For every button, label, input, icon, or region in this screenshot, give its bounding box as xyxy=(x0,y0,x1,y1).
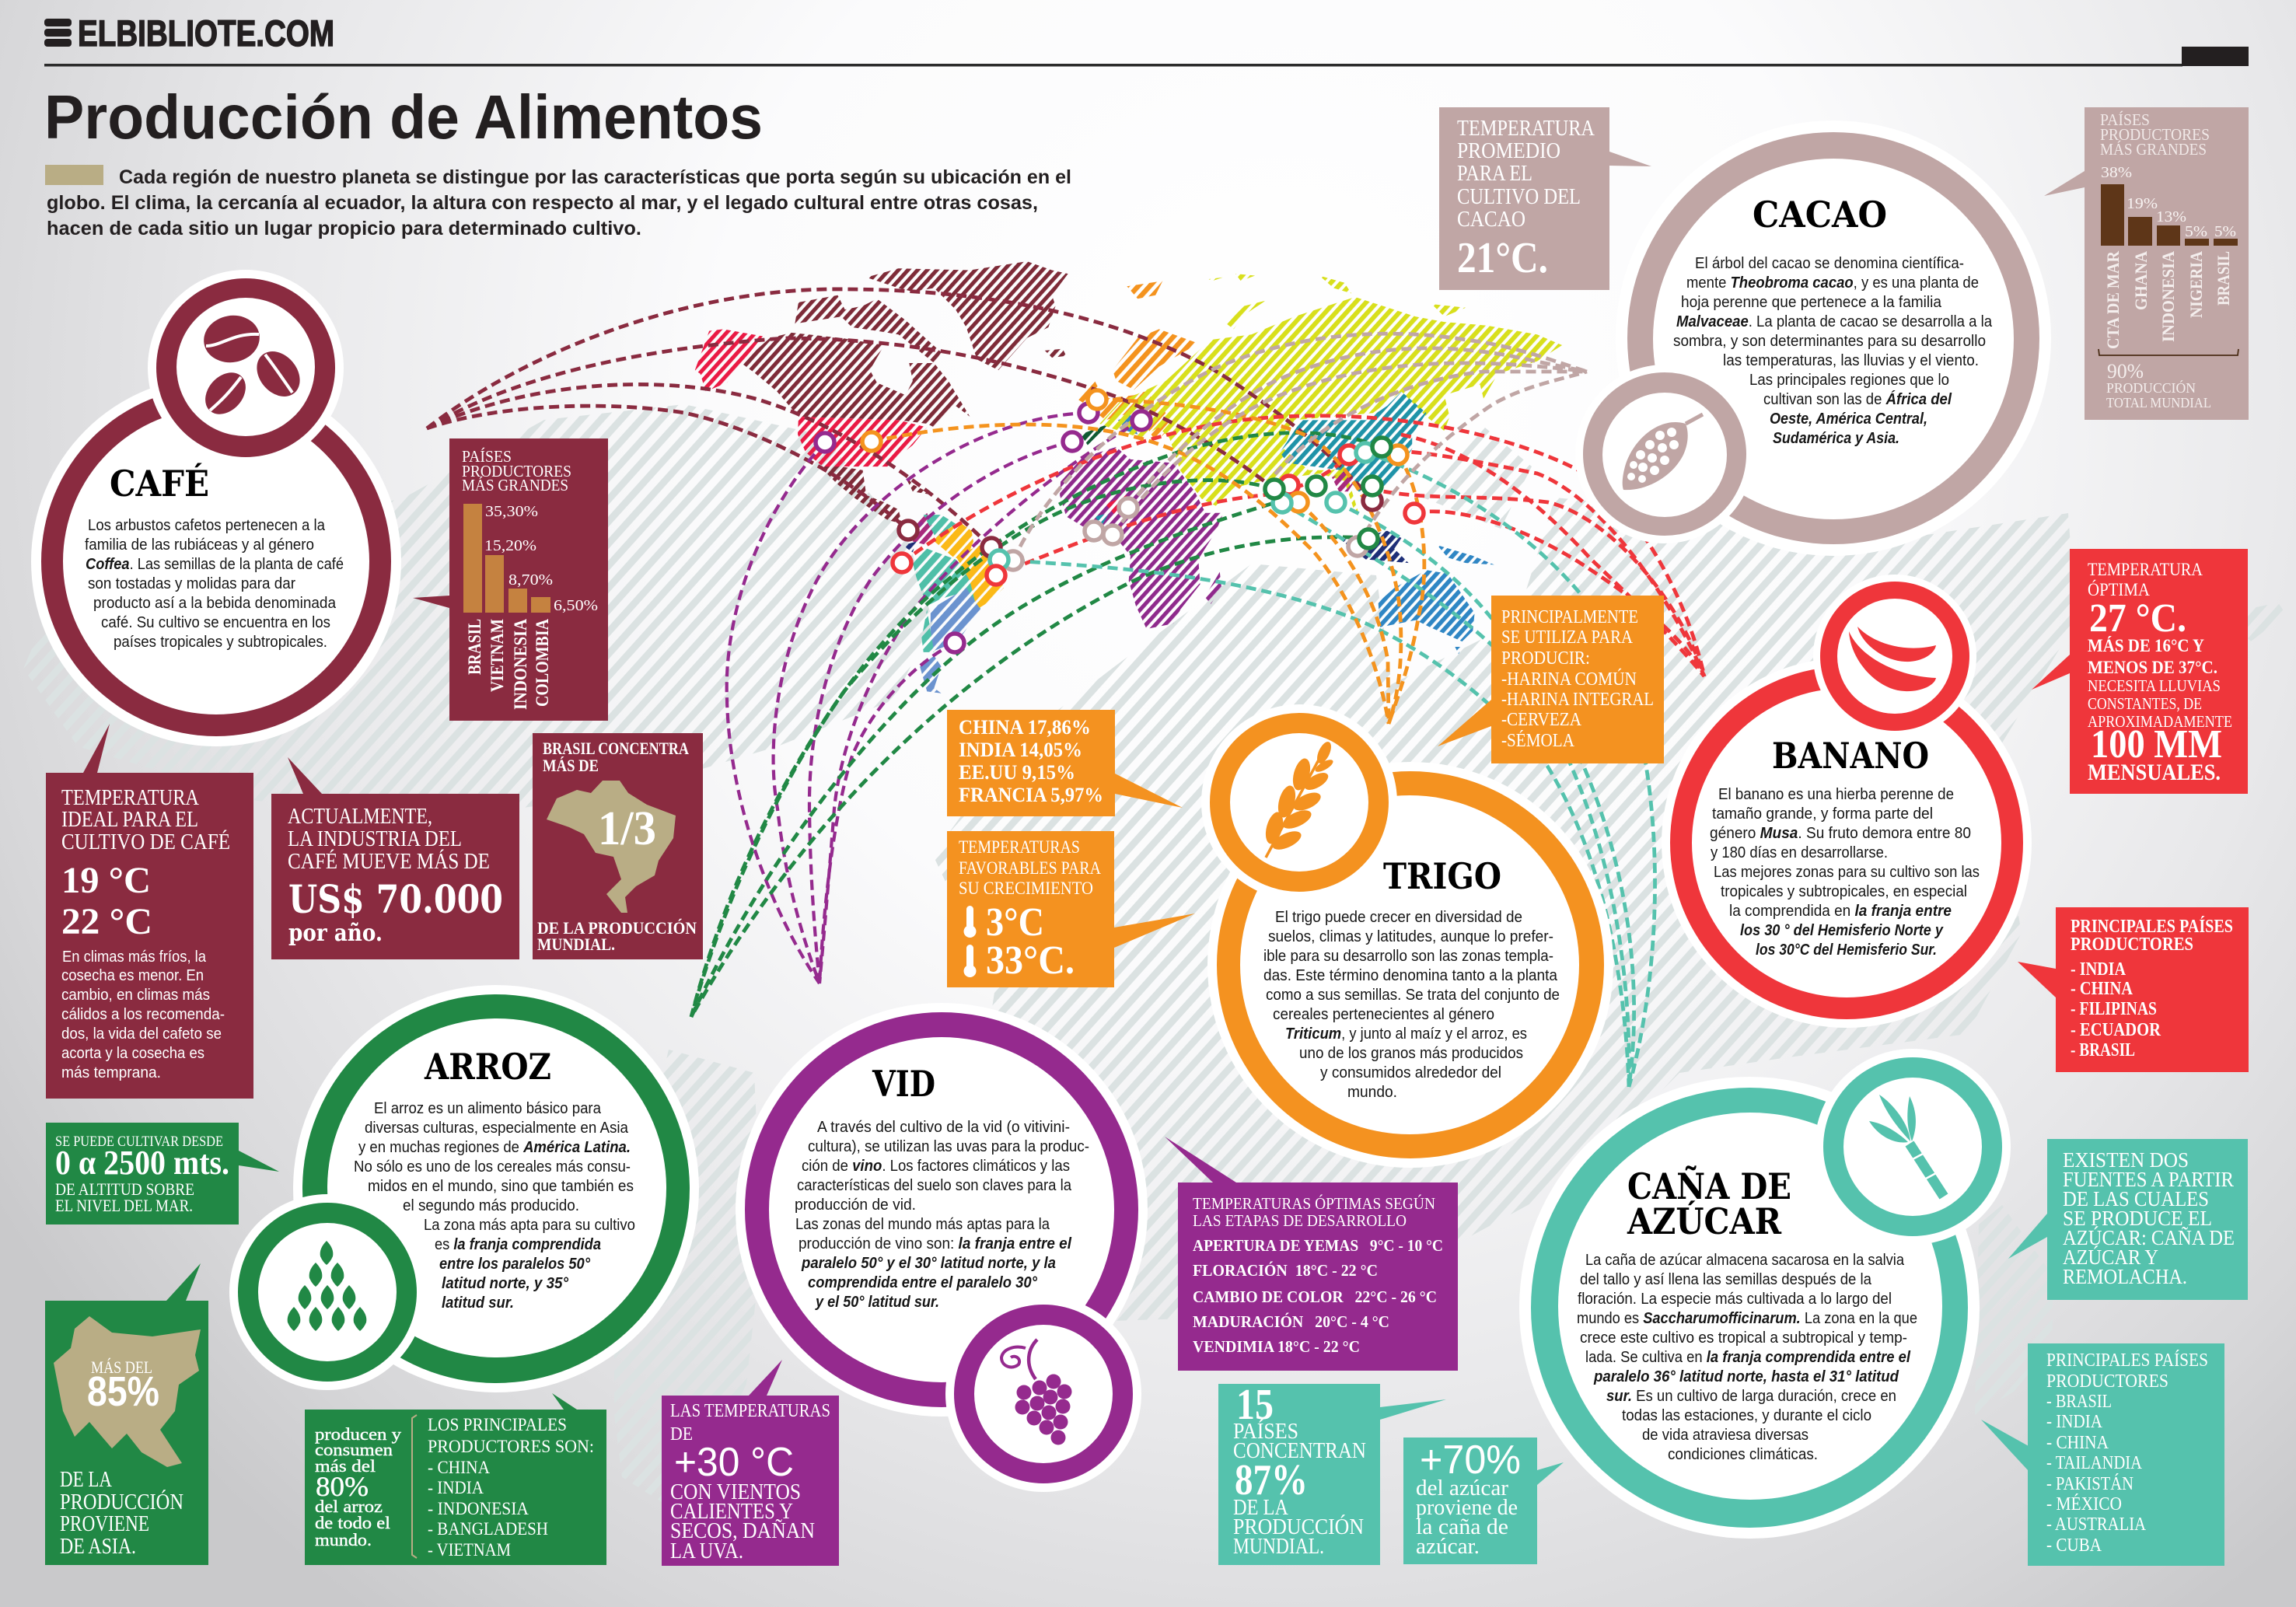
text: caña description: La caña de azúcar almacena sacarosa en la salvia xyxy=(1585,1252,1905,1269)
text: caña description: sur. Es un cultivo de larga duración, crece en xyxy=(1606,1388,1896,1405)
text: cacao description: Sudamérica y Asia. xyxy=(1773,430,1899,447)
callout: fuentes de azúcar: DE LAS CUALES xyxy=(2063,1187,2209,1210)
callout: productores de azúcar: - PAKISTÁN xyxy=(2046,1474,2133,1494)
chart: países productores de cacao: CTA DE MAR xyxy=(2103,250,2123,349)
background world map stripes xyxy=(23,404,2286,1516)
chart: países productores de cacao: GHANA xyxy=(2131,251,2151,310)
callout: temperatura café: más temprana. xyxy=(61,1064,161,1081)
text: vid description: producción de vid. xyxy=(795,1197,916,1214)
text: caña description: mundo es Saccharumofficinarum. La zona en la que xyxy=(1577,1310,1917,1327)
heading: café: CAFÉ xyxy=(110,462,209,505)
callout: temperaturas favorables trigo xyxy=(947,831,1195,987)
callout: temperaturas favorables trigo: FAVORABLES PARA xyxy=(959,858,1101,878)
callout: temperatura banano: TEMPERATURA xyxy=(2088,560,2203,579)
callout: temperatura banano: APROXIMADAMENTE xyxy=(2088,712,2232,731)
title: Producción de Alimentos xyxy=(44,82,763,152)
chart: países productores de cacao: PAÍSES xyxy=(2100,110,2150,129)
text: caña description: paralelo 36° latitud norte, hasta el 31° latitud xyxy=(1593,1368,1899,1385)
chart: países productores de cacao: 13% xyxy=(2156,208,2186,225)
callout: productores de arroz: 80% xyxy=(316,1471,369,1502)
icon: mapa de Asia xyxy=(54,1316,201,1467)
callout: productores de azúcar: - BRASIL xyxy=(2046,1392,2112,1412)
callout: temperatura banano: MÁS DE 16°C Y xyxy=(2088,636,2204,655)
callout: fuentes de azúcar: EXISTEN DOS xyxy=(2063,1148,2189,1172)
callout: productores de arroz xyxy=(305,1393,606,1565)
callout: temperaturas favorables trigo: SU CRECIMIENTO xyxy=(959,879,1093,898)
text: arroz description: latitud norte, y 35° xyxy=(442,1275,569,1292)
text: cacao description: mente Theobroma cacao, y es una planta de xyxy=(1686,274,1979,292)
chart: países productores de cacao: BRASIL xyxy=(2214,251,2233,306)
text: trigo description: y consumidos alrededor del xyxy=(1320,1064,1501,1081)
callout: productores de arroz: - CHINA xyxy=(428,1458,490,1477)
chart: países productores de cacao: PRODUCCIÓN xyxy=(2106,379,2196,396)
callout: productores de azúcar: PRODUCTORES xyxy=(2046,1371,2168,1392)
callout: fuentes de azúcar: AZÚCAR: CAÑA DE xyxy=(2063,1226,2235,1249)
callout: fuentes de azúcar: AZÚCAR Y xyxy=(2063,1245,2158,1269)
callout: temperaturas óptimas vid: VENDIMIA 18°C - 22 °C xyxy=(1193,1337,1360,1356)
text: trigo description: mundo. xyxy=(1347,1084,1397,1101)
text: cacao description: Las principales regiones que lo xyxy=(1749,372,1949,389)
chart: países productores de café: INDONESIA xyxy=(511,619,530,710)
callout: usos del trigo: -HARINA INTEGRAL xyxy=(1501,690,1654,710)
callout: temperatura banano xyxy=(2032,549,2248,794)
heading: arroz: ARROZ xyxy=(424,1046,551,1088)
world map: Asia and Oceania xyxy=(1099,274,1562,654)
callout: productores de arroz: mundo. xyxy=(315,1530,372,1549)
text: vid description: A través del cultivo de la vid (o vitivini- xyxy=(817,1119,1070,1136)
routes: banano xyxy=(902,416,1704,676)
callout: temperatura café: 19 °C xyxy=(61,860,151,901)
callout: 70% azúcar xyxy=(1403,1438,1564,1564)
routes: arroz xyxy=(691,433,1381,1017)
text: arroz description: No sólo es uno de los cereales más consu- xyxy=(354,1158,631,1176)
chart: países productores de café: 8,70% xyxy=(508,571,553,589)
callout: temperaturas favorables trigo: 3°C xyxy=(986,900,1044,945)
callout: productores de banano: - FILIPINAS xyxy=(2071,999,2157,1019)
callout: usos del trigo: SE UTILIZA PARA xyxy=(1501,627,1634,648)
callout: productores de arroz: - INDIA xyxy=(428,1478,484,1497)
callout: altitud arroz: 0 α 2500 mts. xyxy=(55,1144,229,1182)
text: vid description: características del suelo son claves para la xyxy=(797,1177,1072,1194)
callout: industria del café: CAFÉ MUEVE MÁS DE xyxy=(288,850,490,874)
callout: industria del café: ACTUALMENTE, xyxy=(288,805,432,829)
chart: países productores de café: 6,50% xyxy=(554,597,598,614)
callout: 85% Asia: PROVIENE xyxy=(60,1512,149,1536)
callout: productores de trigo xyxy=(947,710,1183,816)
callout: temperatura cacao: PARA EL xyxy=(1457,162,1532,186)
callout: productores de arroz: - INDONESIA xyxy=(428,1499,529,1518)
callout: temperaturas favorables trigo: TEMPERATURAS xyxy=(959,837,1080,857)
text: trigo description: ible para su desarrollo son las zonas templa- xyxy=(1263,948,1553,965)
heading: trigo: TRIGO xyxy=(1383,855,1501,897)
callout: brasil concentra: 1/3 xyxy=(598,802,656,855)
routes: trigo xyxy=(872,400,1424,724)
callout: temperaturas uva: +30 °C xyxy=(674,1440,794,1485)
text: trigo description: Triticum, y junto al maíz y el arroz, es xyxy=(1285,1025,1527,1043)
callout: 70% azúcar: la caña de xyxy=(1416,1515,1508,1539)
callout: usos del trigo: PRODUCIR: xyxy=(1501,648,1590,669)
text: trigo description: das. Este término denomina tanto a la planta xyxy=(1263,967,1558,984)
text: cacao description: El árbol del cacao se denomina científica- xyxy=(1695,255,1964,272)
text: vid description: Las zonas del mundo más aptas para la xyxy=(795,1216,1050,1233)
text: vid description: y el 50° latitud sur. xyxy=(815,1294,939,1311)
intro text xyxy=(45,165,1071,239)
callout: productores de arroz: - BANGLADESH xyxy=(428,1519,548,1539)
callout: productores de banano xyxy=(2018,907,2249,1072)
panel: trigo xyxy=(1201,704,1613,1168)
panel: cacao xyxy=(1575,121,2051,556)
callout: fuentes de azúcar: REMOLACHA. xyxy=(2063,1265,2187,1288)
text: café description: son tostadas y molidas para dar xyxy=(88,575,295,592)
callout: productores de arroz: - VIETNAM xyxy=(428,1540,511,1560)
routes: caña xyxy=(999,452,1655,1087)
chart: países productores de café: 35,30% xyxy=(485,503,538,520)
callout: temperatura banano: CONSTANTES, DE xyxy=(2088,694,2202,713)
text: cacao description: Malvaceae. La planta de cacao se desarrolla a la xyxy=(1676,313,1993,330)
text: vid description: cultura), se utilizan las uvas para la produc- xyxy=(808,1138,1089,1155)
callout: brasil concentra: DE LA PRODUCCIÓN xyxy=(537,918,697,938)
panel: arroz xyxy=(229,985,699,1392)
chart: países productores de cacao: NIGERIA xyxy=(2186,251,2206,318)
text: caña description: lada. Se cultiva en la franja comprendida entre el xyxy=(1585,1349,1910,1366)
callout: altitud arroz: EL NIVEL DEL MAR. xyxy=(55,1196,193,1215)
text: banano description: los 30°C del Hemisferio Sur. xyxy=(1756,941,1937,959)
chart: países productores de cacao: 5% xyxy=(2214,223,2236,240)
callout: brasil concentra: BRASIL CONCENTRA xyxy=(543,739,689,758)
callout: temperaturas óptimas vid: APERTURA DE YEMAS 9°C - 10 °C xyxy=(1193,1236,1443,1255)
callout: fuentes de azúcar: FUENTES A PARTIR xyxy=(2063,1168,2234,1191)
text: banano description: El banano es una hierba perenne de xyxy=(1718,786,1954,803)
callout: temperatura cacao xyxy=(1439,107,1651,290)
intro text: globo. El clima, la cercanía al ecuador, la altura con respecto al mar, y el legado cultural entre otras cosas, xyxy=(47,192,1038,214)
heading: caña de azúcar: AZÚCAR xyxy=(1627,1200,1782,1242)
callout: productores de banano: - ECUADOR xyxy=(2071,1020,2161,1040)
callout: productores de arroz: PRODUCTORES SON: xyxy=(428,1437,594,1456)
callout: temperaturas óptimas vid: CAMBIO DE COLOR 22°C - 26 °C xyxy=(1193,1287,1437,1306)
callout: temperaturas uva: LA UVA. xyxy=(670,1539,743,1563)
callout: brasil concentra: MUNDIAL. xyxy=(537,935,615,954)
callout: temperaturas uva xyxy=(662,1360,839,1566)
callout: temperatura café: cosecha es menor. En xyxy=(61,967,204,984)
text: banano description: los 30 ° del Hemisferio Norte y xyxy=(1740,922,1944,939)
callout: temperaturas uva: CON VIENTOS xyxy=(670,1480,801,1504)
callout: industria del café xyxy=(271,757,519,959)
text: cacao description: sombra, y son determinantes para su desarrollo xyxy=(1673,333,1986,350)
callout: productores de arroz: LOS PRINCIPALES xyxy=(428,1415,567,1434)
text: café description: Los arbustos cafetos pertenecen a la xyxy=(88,517,326,534)
text: caña description: condiciones climáticas. xyxy=(1668,1446,1818,1463)
callout: temperatura banano: MENSUALES. xyxy=(2088,760,2221,785)
chart: países productores de cacao: 38% xyxy=(2101,164,2132,181)
callout: temperaturas óptimas vid: LAS ETAPAS DE DESARROLLO xyxy=(1193,1211,1407,1230)
text: café description: países tropicales y subtropicales. xyxy=(114,634,327,651)
text: banano description: la comprendida en la franja entre xyxy=(1729,903,1952,920)
callout: temperaturas óptimas vid: MADURACIÓN 20°C - 4 °C xyxy=(1193,1312,1389,1331)
chart: países productores de cacao: 90% xyxy=(2107,360,2144,383)
callout: 70% azúcar: +70% xyxy=(1420,1438,1521,1483)
callout: temperaturas uva: DE xyxy=(670,1424,693,1445)
callout: productores de banano: - INDIA xyxy=(2071,959,2127,980)
callout: productores de azúcar: - INDIA xyxy=(2046,1412,2103,1432)
callout: productores de banano: PRINCIPALES PAÍSES xyxy=(2071,917,2233,937)
icon: thermometers xyxy=(964,906,977,977)
text: cacao description xyxy=(1673,255,1993,447)
heading: vid: VID xyxy=(872,1063,935,1105)
panel: banano xyxy=(1662,575,2032,1028)
intro text: hacen de cada sitio un lugar propicio para determinado cultivo. xyxy=(47,218,641,239)
panel: vid xyxy=(736,1003,1148,1492)
callout: temperatura café: cálidos a los recomenda- xyxy=(61,1006,225,1023)
text: café description: producto así a la bebida denominada xyxy=(93,595,337,612)
callout: 70% azúcar: del azúcar xyxy=(1416,1476,1509,1500)
chart: países productores de café: MÁS GRANDES xyxy=(462,476,568,494)
callout: industria del café: US$ 70.000 xyxy=(288,876,503,922)
text: cacao description: hoja perenne que pertenece a la familia xyxy=(1681,294,1942,311)
text: vid description: producción de vino son: la franja entre el xyxy=(799,1235,1071,1252)
icon: grapes xyxy=(1001,1340,1071,1445)
callout: productores de azúcar: - AUSTRALIA xyxy=(2046,1514,2147,1535)
chart: países productores de cacao: TOTAL MUNDIAL xyxy=(2106,395,2211,410)
callout: 85% Asia: 85% xyxy=(87,1368,159,1415)
callout: 85% Asia xyxy=(45,1263,208,1565)
text: arroz description: y en muchas regiones de América Latina. xyxy=(358,1139,631,1156)
callout: temperatura café: IDEAL PARA EL xyxy=(61,808,198,832)
icon: rice grains xyxy=(288,1241,366,1331)
callout: temperatura café: cambio, en climas más xyxy=(61,987,210,1004)
callout: temperatura café: En climas más fríos, la xyxy=(62,948,207,966)
chart: países productores de cacao: MÁS GRANDES xyxy=(2100,140,2207,159)
text: banano description: género Musa. Su fruto demora entre 80 xyxy=(1710,825,1971,842)
callout: temperaturas uva: CALIENTES Y xyxy=(670,1500,793,1524)
callout: temperatura cacao: 21°C. xyxy=(1457,234,1548,282)
text: banano description: Las mejores zonas para su cultivo son las xyxy=(1714,864,1980,881)
callout: 85% Asia: DE ASIA. xyxy=(60,1535,136,1559)
text: banano description: y 180 días en desarrollarse. xyxy=(1711,844,1888,861)
callout: productores de trigo: INDIA 14,05% xyxy=(959,739,1082,761)
heading: caña de azúcar: CAÑA DE xyxy=(1627,1165,1791,1207)
callout: productores de azúcar: - TAILANDIA xyxy=(2046,1453,2143,1473)
text: arroz description: diversas culturas, especialmente en Asia xyxy=(365,1120,629,1137)
text: caña description: de vida atraviesa diversas xyxy=(1642,1427,1808,1444)
callout: altitud arroz xyxy=(46,1123,279,1224)
callout: productores de trigo: CHINA 17,86% xyxy=(959,716,1091,739)
text: caña description: crece este cultivo es tropical a subtropical y temp- xyxy=(1580,1329,1907,1347)
callout: productores de azúcar: - MÉXICO xyxy=(2046,1494,2122,1514)
callout: productores de arroz: más del xyxy=(315,1456,376,1476)
icon: mapa de Brasil xyxy=(547,781,676,913)
text: trigo description: como a sus semillas. Se trata del conjunto de xyxy=(1266,987,1560,1004)
callout: temperatura banano: ÓPTIMA xyxy=(2088,579,2150,599)
text: trigo description: uno de los granos más producidos xyxy=(1299,1045,1523,1062)
text: caña description xyxy=(1577,1252,1917,1463)
chart: países productores de café: BRASIL xyxy=(465,619,484,675)
panel: caña de azúcar xyxy=(1519,1049,2011,1539)
text: vid description xyxy=(795,1119,1089,1311)
callout: usos del trigo: PRINCIPALMENTE xyxy=(1501,607,1638,627)
text: arroz description: La zona más apta para su cultivo xyxy=(424,1217,635,1234)
callout: usos del trigo: -HARINA COMÚN xyxy=(1501,669,1637,690)
callout: productores de arroz: del arroz xyxy=(315,1497,383,1516)
icon: coffee beans xyxy=(197,311,309,422)
callout: 15 países: 15 xyxy=(1236,1381,1274,1429)
callout: productores de azúcar: - CHINA xyxy=(2046,1433,2109,1453)
callout: temperatura cacao: CACAO xyxy=(1457,208,1525,232)
text: cacao description: Oeste, América Central, xyxy=(1770,410,1927,428)
header rule and tab xyxy=(44,47,2249,67)
callout: temperaturas favorables trigo: 33°C. xyxy=(986,938,1075,983)
chart: países productores de café: 15,20% xyxy=(484,537,536,554)
text: arroz description: El arroz es un alimento básico para xyxy=(374,1100,602,1117)
text: arroz description: midos en el mundo, sino que también es xyxy=(368,1178,634,1195)
callout: altitud arroz: SE PUEDE CULTIVAR DESDE xyxy=(55,1134,223,1150)
text: banano description: tropicales y subtropicales, en especial xyxy=(1721,883,1967,900)
text: arroz description: es la franja comprendida xyxy=(435,1236,601,1253)
text: cacao description: las temperaturas, las lluvias y el viento. xyxy=(1723,352,1979,369)
callout: industria del café: LA INDUSTRIA DEL xyxy=(288,827,462,851)
text: arroz description: el segundo más producido. xyxy=(403,1197,579,1214)
callout: usos del trigo: -SÉMOLA xyxy=(1501,731,1575,751)
callout: brasil concentra xyxy=(533,733,703,959)
callout: 85% Asia: PRODUCCIÓN xyxy=(60,1490,183,1514)
route markers on the map xyxy=(816,390,1424,652)
text: vid description: ción de vino. Los factores climáticos y las xyxy=(802,1158,1070,1175)
callout: productores de arroz: producen y xyxy=(315,1424,401,1444)
callout: temperaturas óptimas vid xyxy=(1165,1137,1458,1371)
callout: productores de banano: - BRASIL xyxy=(2071,1040,2135,1060)
callout: 15 países: PAÍSES xyxy=(1233,1420,1298,1444)
callout: temperatura café: dos, la vida del cafeto se xyxy=(61,1025,222,1043)
text: café description xyxy=(85,517,344,651)
text: arroz description xyxy=(354,1100,635,1312)
icon: bananas xyxy=(1849,627,1936,691)
callout: 15 países xyxy=(1218,1381,1446,1565)
text: arroz description: latitud sur. xyxy=(442,1294,514,1312)
text: trigo description: El trigo puede crecer en diversidad de xyxy=(1275,909,1522,926)
routes: vid xyxy=(727,413,1142,983)
chart: países productores de café: VIETNAM xyxy=(488,619,507,692)
callout: productores de azúcar xyxy=(1981,1343,2224,1566)
callout: temperatura cacao: TEMPERATURA xyxy=(1457,117,1595,141)
callout: fuentes de azúcar xyxy=(2008,1139,2248,1300)
callout: productores de banano: PRODUCTORES xyxy=(2071,935,2193,955)
callout: temperatura café: 22 °C xyxy=(61,901,152,942)
callout: productores de azúcar: - CUBA xyxy=(2046,1535,2102,1556)
chart: países productores de café: PRODUCTORES xyxy=(462,462,571,480)
callout: temperaturas uva: SECOS, DAÑAN xyxy=(670,1519,815,1543)
text: café description: familia de las rubiáceas y al género xyxy=(85,536,314,554)
text: cacao description: cultivan son las de África del xyxy=(1763,390,1952,408)
callout: productores de arroz: consumen xyxy=(315,1440,393,1459)
callout: productores de azúcar: PRINCIPALES PAÍSES xyxy=(2046,1350,2208,1371)
text: trigo description: suelos, climas y latitudes, aunque lo prefer- xyxy=(1268,928,1553,945)
heading: cacao: CACAO xyxy=(1753,194,1887,236)
callout: 85% Asia: DE LA xyxy=(60,1468,113,1492)
heading: banano: BANANO xyxy=(1772,735,1929,777)
callout: 15 países: PRODUCCIÓN xyxy=(1233,1515,1364,1539)
callout: temperatura café xyxy=(46,724,253,1099)
callout: 15 países: MUNDIAL. xyxy=(1233,1535,1324,1559)
text: trigo description xyxy=(1263,909,1560,1101)
callout: temperatura café: acorta y la cosecha es xyxy=(61,1045,204,1062)
callout: 15 países: DE LA xyxy=(1233,1496,1289,1520)
trade routes: dashed arcs xyxy=(427,289,1704,1087)
text: arroz description: entre los paralelos 50° xyxy=(439,1256,591,1273)
callout: usos del trigo xyxy=(1438,596,1664,763)
world map: Americas, Africa, Europe west xyxy=(695,261,1223,693)
text: café description: Coffea. Las semillas de la planta de café xyxy=(86,556,344,573)
logo: ELBIBLIOTE.COM xyxy=(78,12,334,54)
text: banano description xyxy=(1710,786,1980,959)
callout: 15 países: CONCENTRAN xyxy=(1233,1439,1366,1463)
text: caña description: floración. La especie más cultivada a lo largo del xyxy=(1578,1291,1892,1308)
callout: fuentes de azúcar: SE PRODUCE EL xyxy=(2063,1207,2212,1230)
callout: temperatura cacao: PROMEDIO xyxy=(1457,139,1560,163)
heading: caña de azúcar xyxy=(1627,1165,1791,1242)
callout: temperaturas óptimas vid: FLORACIÓN 18°C - 22 °C xyxy=(1193,1261,1378,1280)
callout: temperatura cacao: CULTIVO DEL xyxy=(1457,185,1581,209)
callout: 15 países: 87% xyxy=(1235,1456,1308,1504)
callout: 70% azúcar: proviene de xyxy=(1416,1496,1518,1520)
icon: cacao pod xyxy=(1623,414,1703,490)
callout: productores de trigo: FRANCIA 5,97% xyxy=(959,784,1103,806)
icon: wheat xyxy=(1263,739,1335,858)
callout: temperaturas uva: LAS TEMPERATURAS xyxy=(670,1401,830,1421)
callout: 70% azúcar: azúcar. xyxy=(1416,1535,1480,1559)
text: caña description: del tallo y así llena las semillas después de la xyxy=(1580,1271,1872,1288)
chart: países productores de café xyxy=(413,438,608,721)
callout: temperatura banano: 100 MM xyxy=(2091,722,2222,767)
callout: temperatura banano: MENOS DE 37°C. xyxy=(2088,658,2217,677)
chart: países productores de cacao: PRODUCTORES xyxy=(2100,125,2210,144)
chart: países productores de cacao: 5% xyxy=(2185,223,2207,240)
callout: industria del café: por año. xyxy=(288,920,383,947)
text: vid description: comprendida entre el paralelo 30° xyxy=(808,1274,1038,1291)
intro text: Cada región de nuestro planeta se distingue por las características que porta según su ubicación en el xyxy=(119,166,1071,188)
text: café description: café. Su cultivo se encuentra en los xyxy=(101,614,330,631)
callout: temperatura banano: 27 °C. xyxy=(2089,596,2186,641)
callout: temperaturas óptimas vid: TEMPERATURAS ÓPTIMAS SEGÚN xyxy=(1193,1194,1435,1213)
panel: café xyxy=(31,270,401,746)
text: caña description: todas las estaciones, y durante el ciclo xyxy=(1622,1407,1871,1424)
text: banano description: tamaño grande, y forma parte del xyxy=(1712,805,1933,823)
chart: países productores de cacao xyxy=(2044,107,2249,420)
callout: temperatura café: TEMPERATURA xyxy=(61,786,200,810)
callout: productores de trigo: EE.UU 9,15% xyxy=(959,761,1075,784)
callout: productores de arroz: de todo el xyxy=(315,1513,390,1532)
callout: temperatura café: CULTIVO DE CAFÉ xyxy=(61,830,230,854)
routes: cacao xyxy=(1013,334,1587,561)
callout: 85% Asia: MÁS DEL xyxy=(91,1357,152,1377)
callout: altitud arroz: DE ALTITUD SOBRE xyxy=(55,1179,194,1199)
text: trigo description: cereales pertenecientes al género xyxy=(1273,1006,1494,1023)
callout: temperatura banano: NECESITA LLUVIAS xyxy=(2088,676,2221,695)
chart: países productores de cacao: 19% xyxy=(2127,195,2158,212)
chart: países productores de café: COLOMBIA xyxy=(533,619,552,707)
callout: productores de banano: - CHINA xyxy=(2071,979,2133,999)
chart: países productores de café: PAÍSES xyxy=(462,447,512,466)
text: vid description: paralelo 50° y el 30° latitud norte, y la xyxy=(801,1255,1056,1272)
callout: usos del trigo: -CERVEZA xyxy=(1501,710,1582,730)
callout: brasil concentra: MÁS DE xyxy=(543,756,599,775)
icon: sugar cane xyxy=(1869,1095,1944,1197)
chart: países productores de cacao: INDONESIA xyxy=(2158,251,2178,342)
routes: café xyxy=(427,289,1372,547)
